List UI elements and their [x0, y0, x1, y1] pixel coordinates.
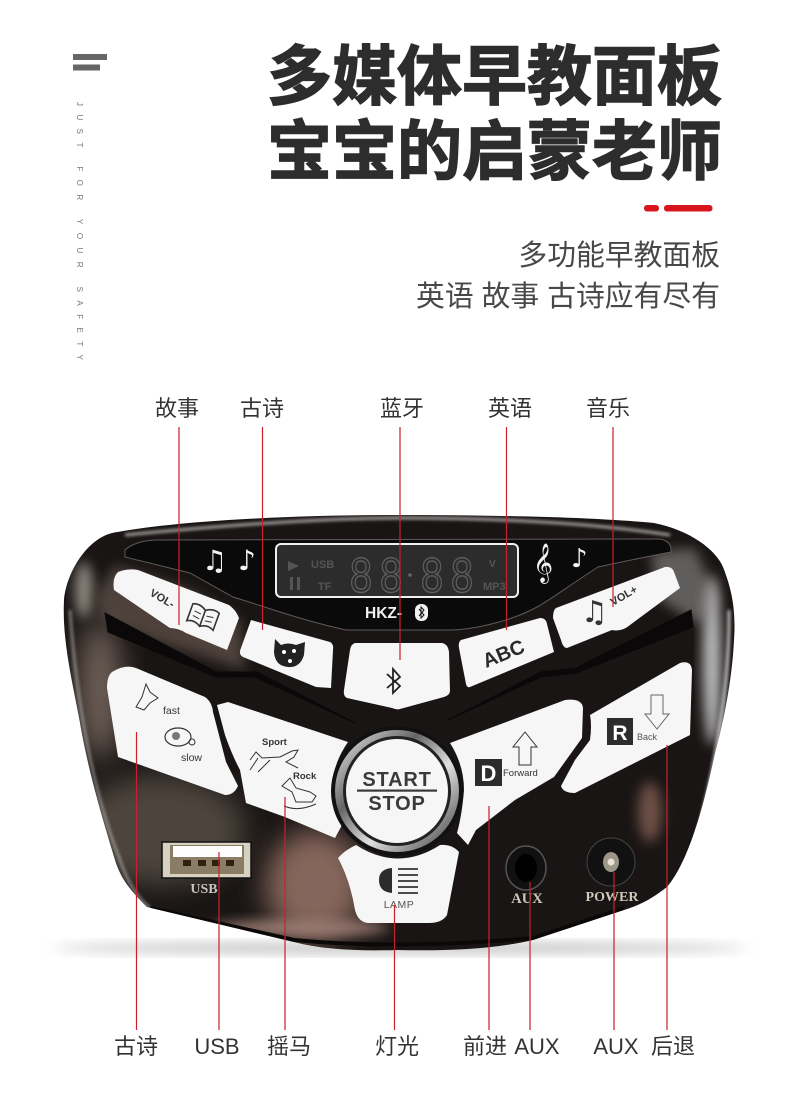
- music notes left: ♪: [238, 544, 256, 577]
- title: 多媒体早教面板: [267, 40, 722, 113]
- button: sport rock: [217, 702, 348, 838]
- aux jack: AUX: [511, 891, 543, 907]
- LCD display: V: [489, 559, 496, 570]
- power jack: POWER: [586, 890, 639, 905]
- button: sport rock: Rock: [293, 771, 317, 782]
- bottom callouts: [114, 732, 695, 1059]
- callout: AUX: AUX: [514, 1034, 560, 1059]
- music notes right: 𝄞: [533, 543, 553, 584]
- floor shadow: [55, 943, 745, 953]
- button: ABC: [459, 618, 554, 687]
- button: lamp: [338, 845, 459, 923]
- board body: [50, 505, 750, 965]
- callout: music: 音乐: [586, 396, 630, 421]
- subtitle: [416, 240, 720, 313]
- callout: poem bottom: 古诗: [114, 1034, 158, 1059]
- music notes right: [533, 543, 588, 584]
- icon: menu bars: [73, 54, 107, 70]
- model label HKZ: HKZ-: [365, 605, 402, 622]
- LCD display: USB: [311, 559, 334, 571]
- groove right: [448, 610, 693, 720]
- model label HKZ: [365, 604, 428, 622]
- music notes right: ♪: [571, 544, 588, 574]
- vertical tagline: JUST FOR YOUR SAFETY: [75, 102, 84, 361]
- callout: forward: 前进: [463, 1034, 507, 1059]
- button: fast slow: fast: [163, 705, 180, 717]
- LCD display: TF: [318, 581, 332, 593]
- aux jack: [506, 846, 546, 907]
- button: start stop: START: [362, 769, 432, 791]
- black display bezel: [125, 539, 671, 630]
- power jack: [586, 838, 639, 905]
- subtitle: 多功能早教面板: [518, 240, 720, 272]
- callout: English: 英语: [488, 396, 532, 421]
- button: VOL+ music: [553, 567, 680, 648]
- callout: USB: USB: [194, 1034, 240, 1059]
- button: forward: Forward: [503, 768, 538, 779]
- red accent dashes: [644, 205, 712, 212]
- button: VOL+ music: VOL+: [608, 584, 640, 609]
- music notes left: [202, 544, 256, 577]
- button: back: Back: [637, 732, 658, 742]
- button: sport rock: Sport: [262, 737, 288, 748]
- title: 宝宝的启蒙老师: [267, 115, 722, 188]
- callout: story: 故事: [155, 396, 199, 421]
- callout: lamp: 灯光: [375, 1034, 419, 1059]
- button: VOL- story: [114, 569, 239, 650]
- top callouts: [155, 396, 630, 660]
- groove left: [105, 613, 355, 723]
- usb port: USB: [190, 882, 218, 897]
- usb port: [162, 842, 251, 897]
- button: back: R: [612, 722, 628, 745]
- button: ABC: ABC: [480, 636, 528, 673]
- LCD display: 8888: [349, 550, 474, 608]
- button: start stop: [331, 726, 463, 856]
- subtitle: 英语 故事 古诗应有尽有: [416, 281, 720, 313]
- button: back: [561, 662, 692, 793]
- music notes left: ♫: [202, 544, 227, 577]
- button: bluetooth: [344, 643, 450, 709]
- button: fast slow: slow: [181, 752, 202, 764]
- button: lamp: LAMP: [384, 899, 414, 911]
- LCD display: [276, 544, 518, 608]
- button: cat story: [240, 620, 333, 688]
- callout: power AUX: AUX: [593, 1034, 639, 1059]
- button: start stop: STOP: [368, 793, 426, 815]
- LCD display: MP3: [483, 581, 506, 593]
- button: VOL- story: VOL-: [148, 587, 177, 611]
- button: fast slow: [107, 667, 238, 795]
- callout: poem: 古诗: [240, 396, 284, 421]
- button: forward: [450, 700, 583, 845]
- title: [267, 40, 722, 188]
- callout: bluetooth: 蓝牙: [380, 396, 424, 421]
- button: forward: D: [481, 761, 496, 786]
- panel: control board: [50, 505, 750, 965]
- button: VOL+ music: ♫: [581, 595, 608, 630]
- callout: rocking horse: 摇马: [267, 1034, 311, 1059]
- callout: back: 后退: [651, 1034, 695, 1059]
